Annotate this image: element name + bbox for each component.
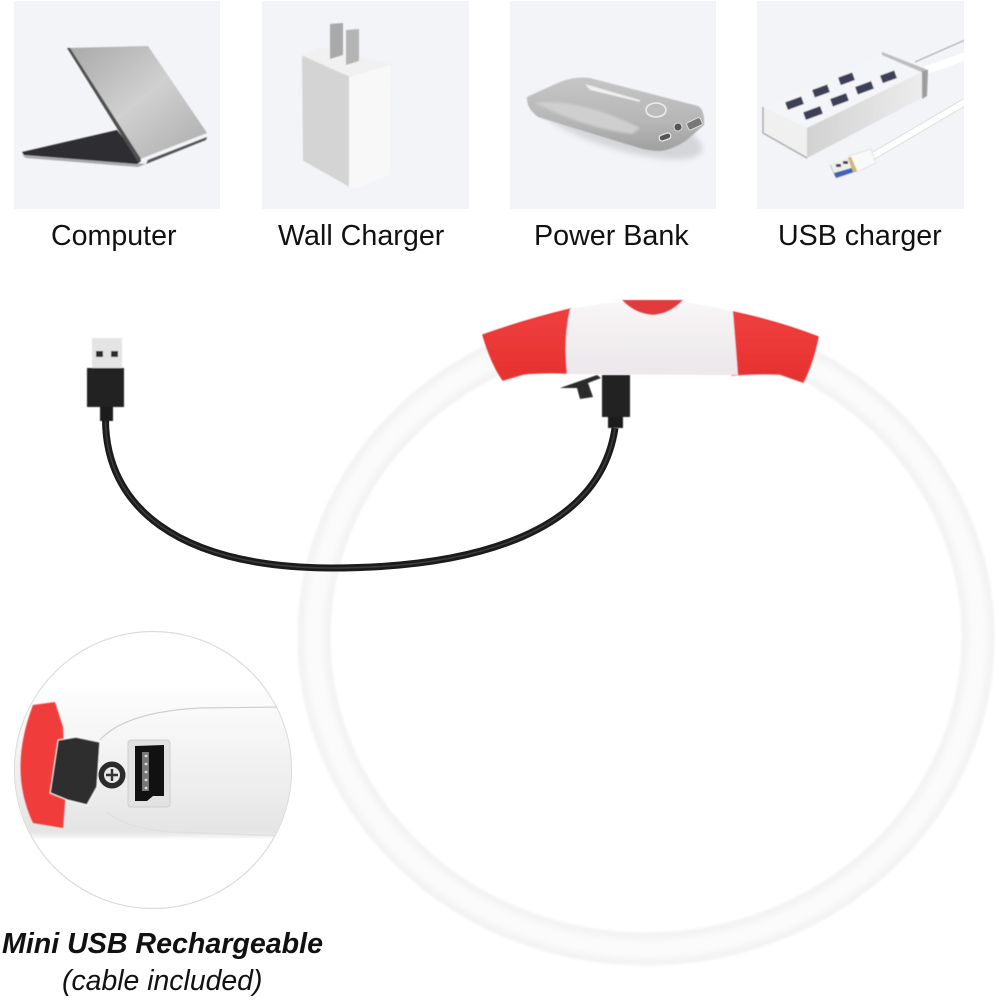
- usb-a plug: [87, 338, 124, 421]
- callout circle: mini usb port: [10, 632, 300, 908]
- label: computer: Computer: [51, 220, 177, 252]
- caption: cable included: (cable included): [62, 965, 262, 997]
- mini usb port: [128, 740, 170, 807]
- right red sleeve: [732, 312, 818, 382]
- icon: power bank: [527, 76, 709, 174]
- screw: [98, 762, 126, 788]
- panel: computer: [14, 1, 220, 209]
- rubber cap: [50, 737, 100, 805]
- icon: usb charger: [763, 40, 965, 178]
- button ring: [646, 103, 666, 117]
- collar ring: [314, 325, 978, 949]
- label: power bank: Power Bank: [534, 220, 689, 252]
- device body: [10, 688, 300, 838]
- label: wall charger: Wall Charger: [278, 220, 445, 252]
- usb cable: [87, 338, 615, 568]
- icon: wall charger: [302, 23, 391, 187]
- panel: wall charger: [262, 1, 469, 209]
- red sleeve: [20, 702, 66, 828]
- red centre mark: [622, 300, 683, 315]
- left red sleeve: [483, 309, 571, 380]
- usb slots: [785, 71, 897, 120]
- mini usb connector: [602, 375, 630, 428]
- ports: [658, 132, 672, 142]
- power cords: [915, 40, 965, 62]
- usb plug: [830, 149, 876, 178]
- rubber cap on module: [560, 375, 601, 399]
- panel: usb charger: [757, 1, 965, 209]
- panel: power bank: [510, 1, 716, 209]
- label: usb charger: USB charger: [778, 220, 942, 252]
- caption: mini usb rechargeable: Mini USB Rechargeable: [2, 928, 323, 960]
- collar light module: [483, 300, 818, 428]
- icon: laptop: [22, 46, 207, 167]
- white centre: [566, 300, 738, 375]
